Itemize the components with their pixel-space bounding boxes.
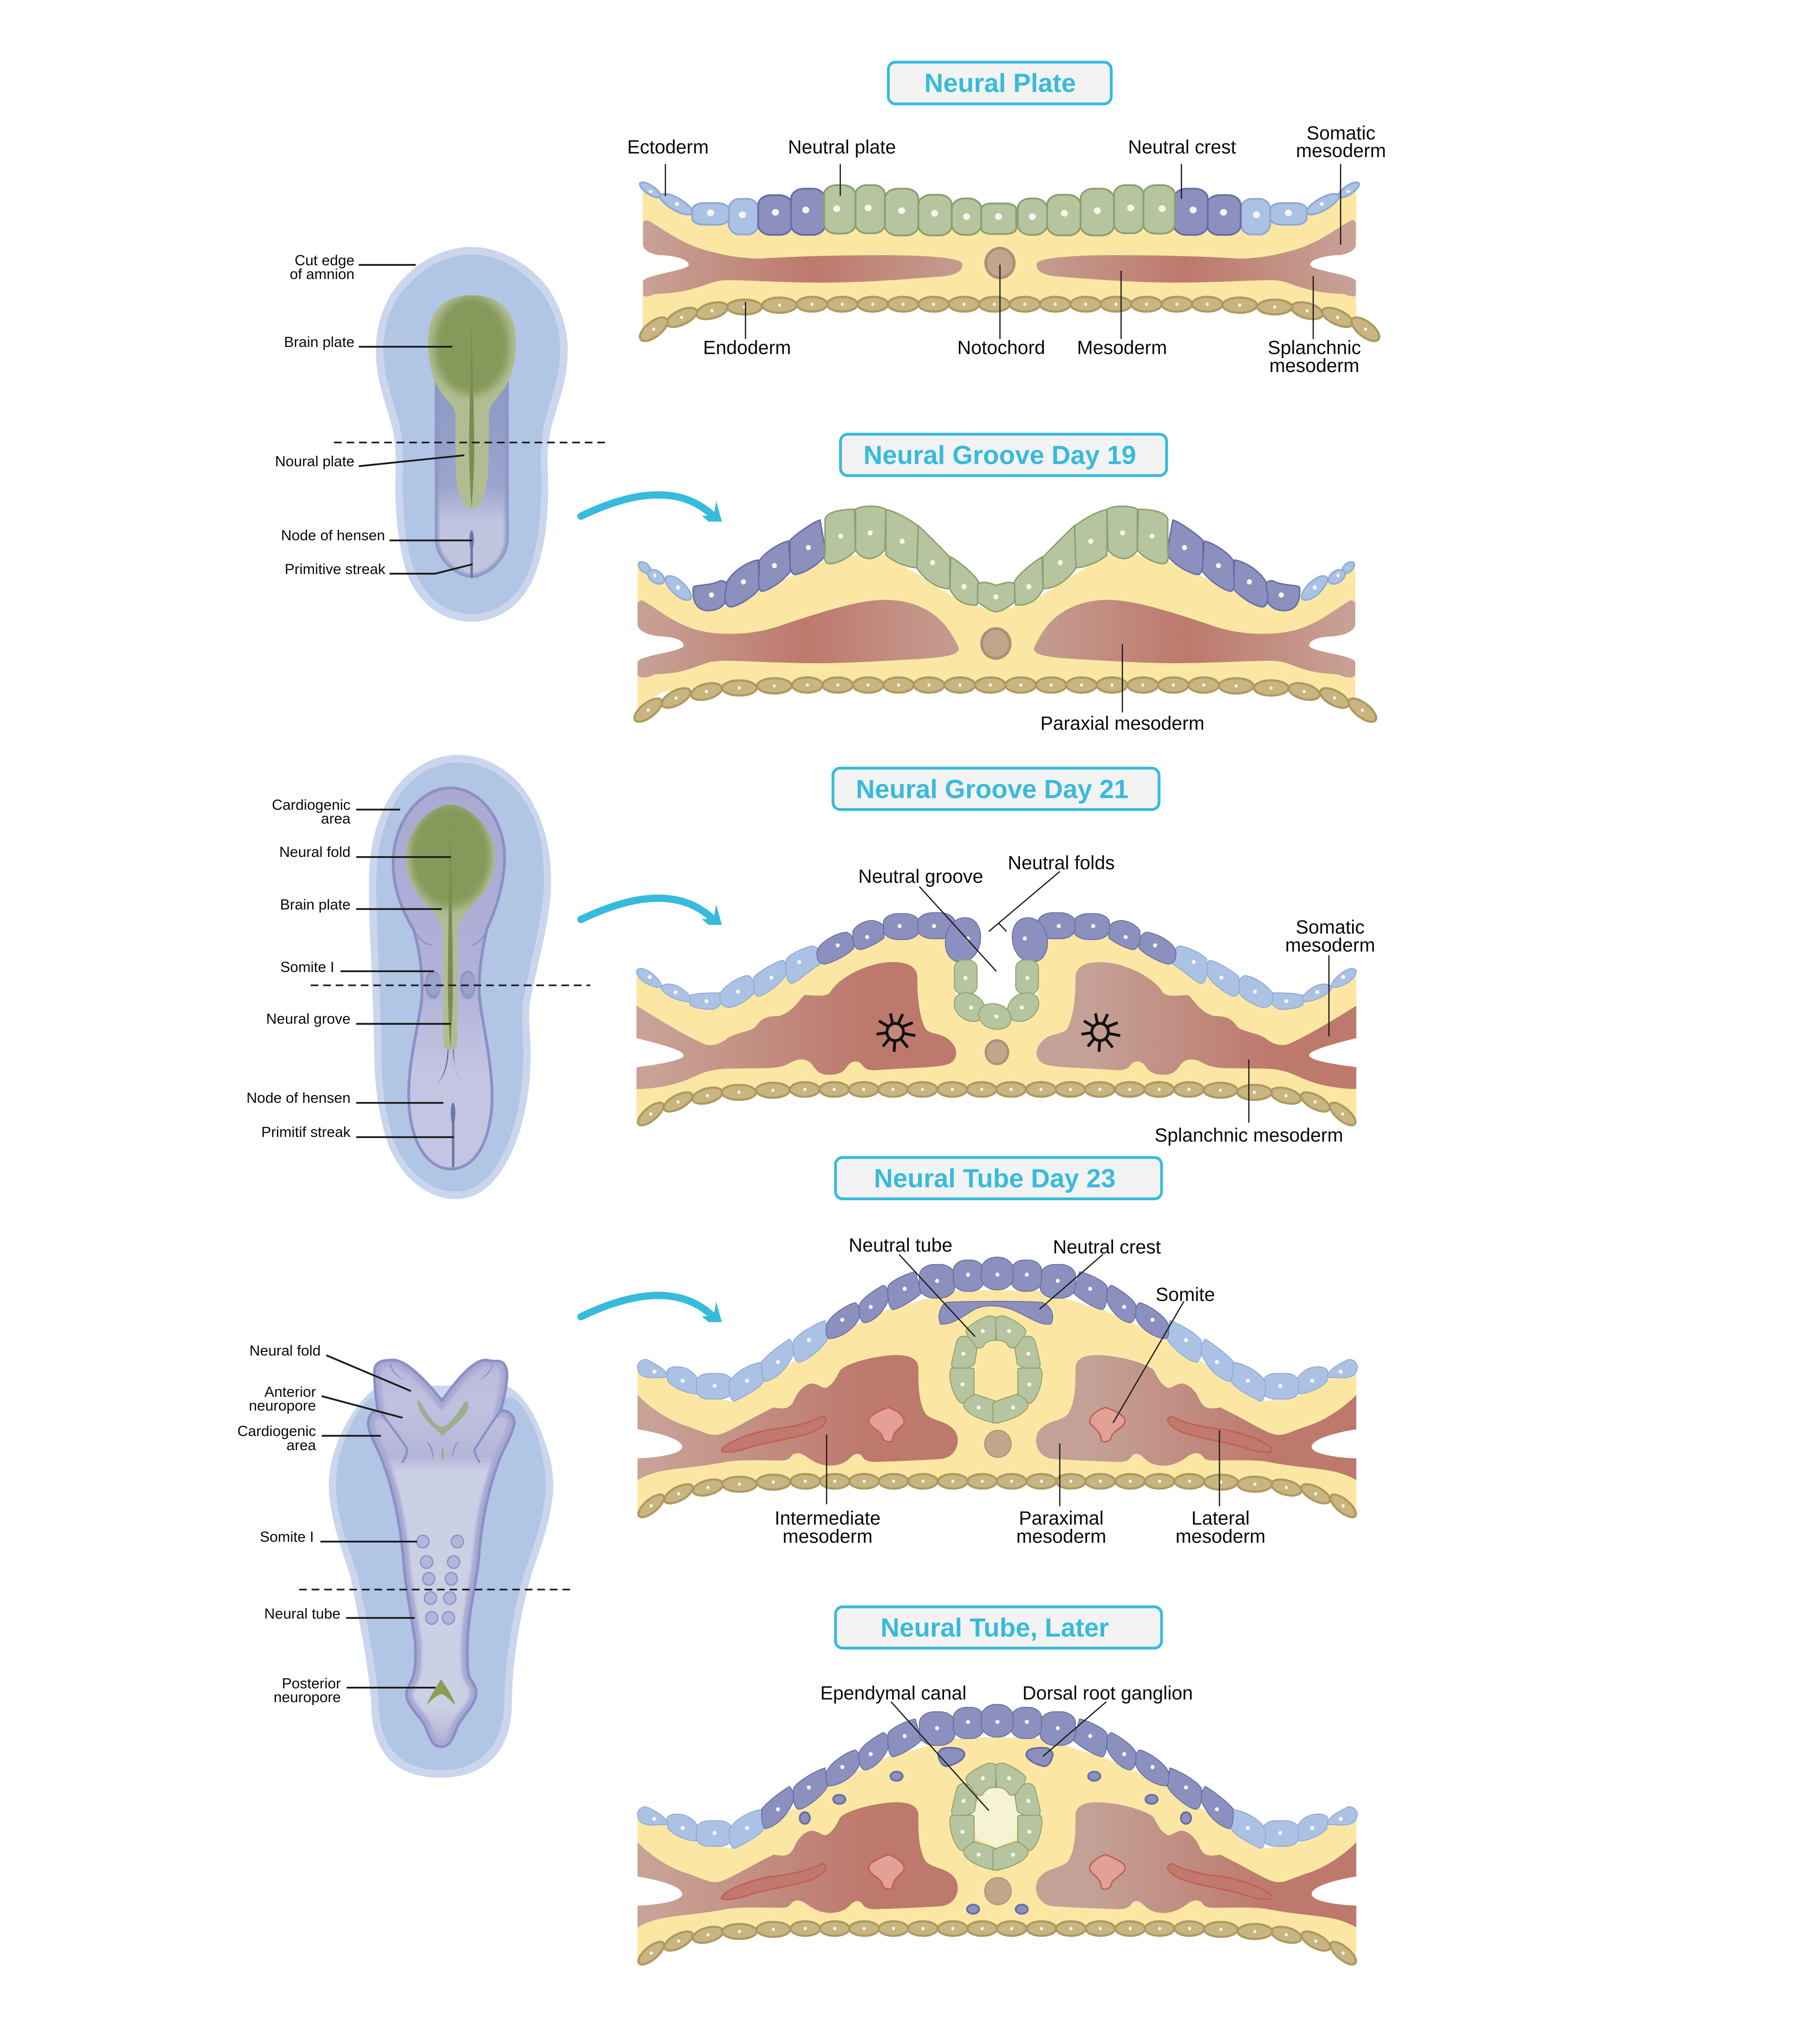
- label: splanchnic mesoderm: mesoderm: [1270, 355, 1359, 376]
- heading: Neural Groove Day 19: Neural Groove Day 19: [863, 440, 1136, 470]
- label: primitif streak: Primitif streak: [261, 1124, 351, 1140]
- label: posterior neuropore: neuropore: [274, 1689, 341, 1705]
- label: cardiogenic area: area: [321, 810, 351, 827]
- label: intermediate mesoderm: Intermediate: [775, 1507, 880, 1529]
- label: cut edge of amnion: Cut edge: [295, 252, 354, 269]
- panel: neural tube day 23 section: [626, 1157, 1367, 1547]
- icon: star cell right: [1081, 1013, 1120, 1052]
- heading: Neural Tube Day 23: [836, 1157, 1162, 1199]
- leader lines embryo 2: [341, 810, 454, 1137]
- label: cardiogenic area: Cardiogenic: [237, 1423, 316, 1439]
- label: ependymal canal: Ependymal canal: [820, 1682, 967, 1704]
- label: mesoderm: Mesoderm: [1077, 337, 1167, 358]
- panel: neural tube later section: [626, 1607, 1367, 1968]
- arrow 3: [581, 1295, 722, 1322]
- label: noural plate: Noural plate: [275, 453, 354, 470]
- label: paraxial mesoderm: Paraxial mesoderm: [1040, 712, 1204, 734]
- label: primitive streak: Primitive streak: [285, 561, 386, 577]
- section line: [334, 442, 606, 443]
- icon: star cell left: [876, 1013, 915, 1052]
- cross-section: day 21: [626, 913, 1367, 1129]
- heading: Neural Tube, Later: Neural Tube, Later: [880, 1613, 1109, 1642]
- heading: Neural Groove Day 21: Neural Groove Day 21: [856, 774, 1128, 804]
- embryo illustration 2: [369, 755, 551, 1199]
- label: dorsal root ganglion: Dorsal root ganglion: [1022, 1682, 1193, 1704]
- label: endoderm: Endoderm: [703, 337, 791, 358]
- section line: [311, 984, 590, 986]
- label: splanchnic mesoderm: Splanchnic mesoderm: [1155, 1124, 1343, 1146]
- label: neutral crest: Neutral crest: [1053, 1236, 1161, 1258]
- panel: embryo neural plate stage: [275, 247, 606, 622]
- label: notochord: Notochord: [957, 337, 1045, 358]
- label: brain plate: Brain plate: [284, 334, 354, 350]
- label: neutral groove: Neutral groove: [858, 865, 983, 887]
- panel: embryo neural groove stage: [246, 755, 590, 1199]
- heading: Neural Groove Day 21: [833, 768, 1159, 810]
- label: brain plate: Brain plate: [280, 896, 351, 913]
- label: somatic mesoderm: mesoderm: [1285, 934, 1375, 956]
- cross-section: later: [626, 1705, 1367, 1968]
- heading: Neural Plate: Neural Plate: [924, 68, 1076, 98]
- label: ectoderm: Ectoderm: [627, 136, 709, 158]
- label: neural fold: Neural fold: [279, 844, 351, 860]
- label: anterior neuropore: neuropore: [249, 1397, 316, 1414]
- label: somatic mesoderm: Somatic: [1306, 122, 1376, 144]
- label: somite I: Somite I: [260, 1528, 314, 1545]
- cross-section: day 19: [626, 506, 1380, 726]
- leader lines panel 4: [827, 1254, 1219, 1506]
- label: somite I: Somite I: [280, 959, 334, 975]
- label: lateral mesoderm: mesoderm: [1176, 1525, 1266, 1547]
- label: neutral folds: Neutral folds: [1008, 852, 1115, 873]
- label: neutral plate: Neutral plate: [788, 136, 896, 158]
- cross-section: neural plate: [631, 182, 1383, 345]
- label: paraximal mesoderm: Paraximal: [1019, 1507, 1104, 1529]
- arrow 1: [581, 495, 722, 522]
- leader lines panel 3: [919, 871, 1329, 1123]
- label: cut edge of amnion: of amnion: [290, 266, 354, 282]
- embryo illustration 3: [329, 1360, 553, 1778]
- heading: Neural Groove Day 19: [840, 434, 1166, 476]
- label: paraximal mesoderm: mesoderm: [1016, 1525, 1106, 1547]
- label: posterior neuropore: Posterior: [282, 1675, 341, 1692]
- leader lines panel 5: [891, 1702, 1107, 1810]
- arrow 2: [581, 898, 722, 925]
- label: neural grove: Neural grove: [266, 1011, 351, 1027]
- embryo illustration 1: [376, 247, 568, 622]
- panel: neural plate section: [627, 62, 1386, 376]
- label: node of hensen: Node of hensen: [246, 1089, 351, 1106]
- label: somatic mesoderm: mesoderm: [1296, 140, 1386, 161]
- panel: neural groove day 19 section: [626, 434, 1380, 734]
- label: neural tube: Neural tube: [264, 1605, 341, 1622]
- panel: embryo neural tube stage: [237, 1342, 572, 1778]
- cross-section: day 23: [626, 1257, 1367, 1521]
- heading: Neural Tube Day 23: Neural Tube Day 23: [874, 1163, 1115, 1193]
- label: lateral mesoderm: Lateral: [1191, 1507, 1250, 1529]
- panel: neural groove day 21 section: [626, 768, 1375, 1146]
- section line: [299, 1589, 572, 1591]
- label: intermediate mesoderm: mesoderm: [783, 1525, 872, 1547]
- label: node of hensen: Node of hensen: [281, 527, 385, 544]
- label: cardiogenic area: area: [286, 1437, 316, 1453]
- leader line panel 2: [1122, 644, 1123, 713]
- label: splanchnic mesoderm: Splanchnic: [1268, 337, 1361, 358]
- leader lines embryo 3: [320, 1355, 436, 1688]
- label: somatic mesoderm: Somatic: [1296, 916, 1365, 937]
- label: neural fold: Neural fold: [250, 1342, 321, 1359]
- label: cardiogenic area: Cardiogenic: [272, 797, 351, 813]
- label: neutral tube: Neutral tube: [849, 1234, 952, 1256]
- heading: Neural Tube, Later: [836, 1607, 1162, 1648]
- leader lines embryo 1: [359, 265, 472, 574]
- label: neutral crest: Neutral crest: [1128, 136, 1236, 158]
- label: somite: Somite: [1155, 1284, 1215, 1305]
- label: anterior neuropore: Anterior: [265, 1383, 316, 1400]
- leader lines panel 1: [665, 164, 1341, 339]
- heading: Neural Plate: [888, 62, 1111, 104]
